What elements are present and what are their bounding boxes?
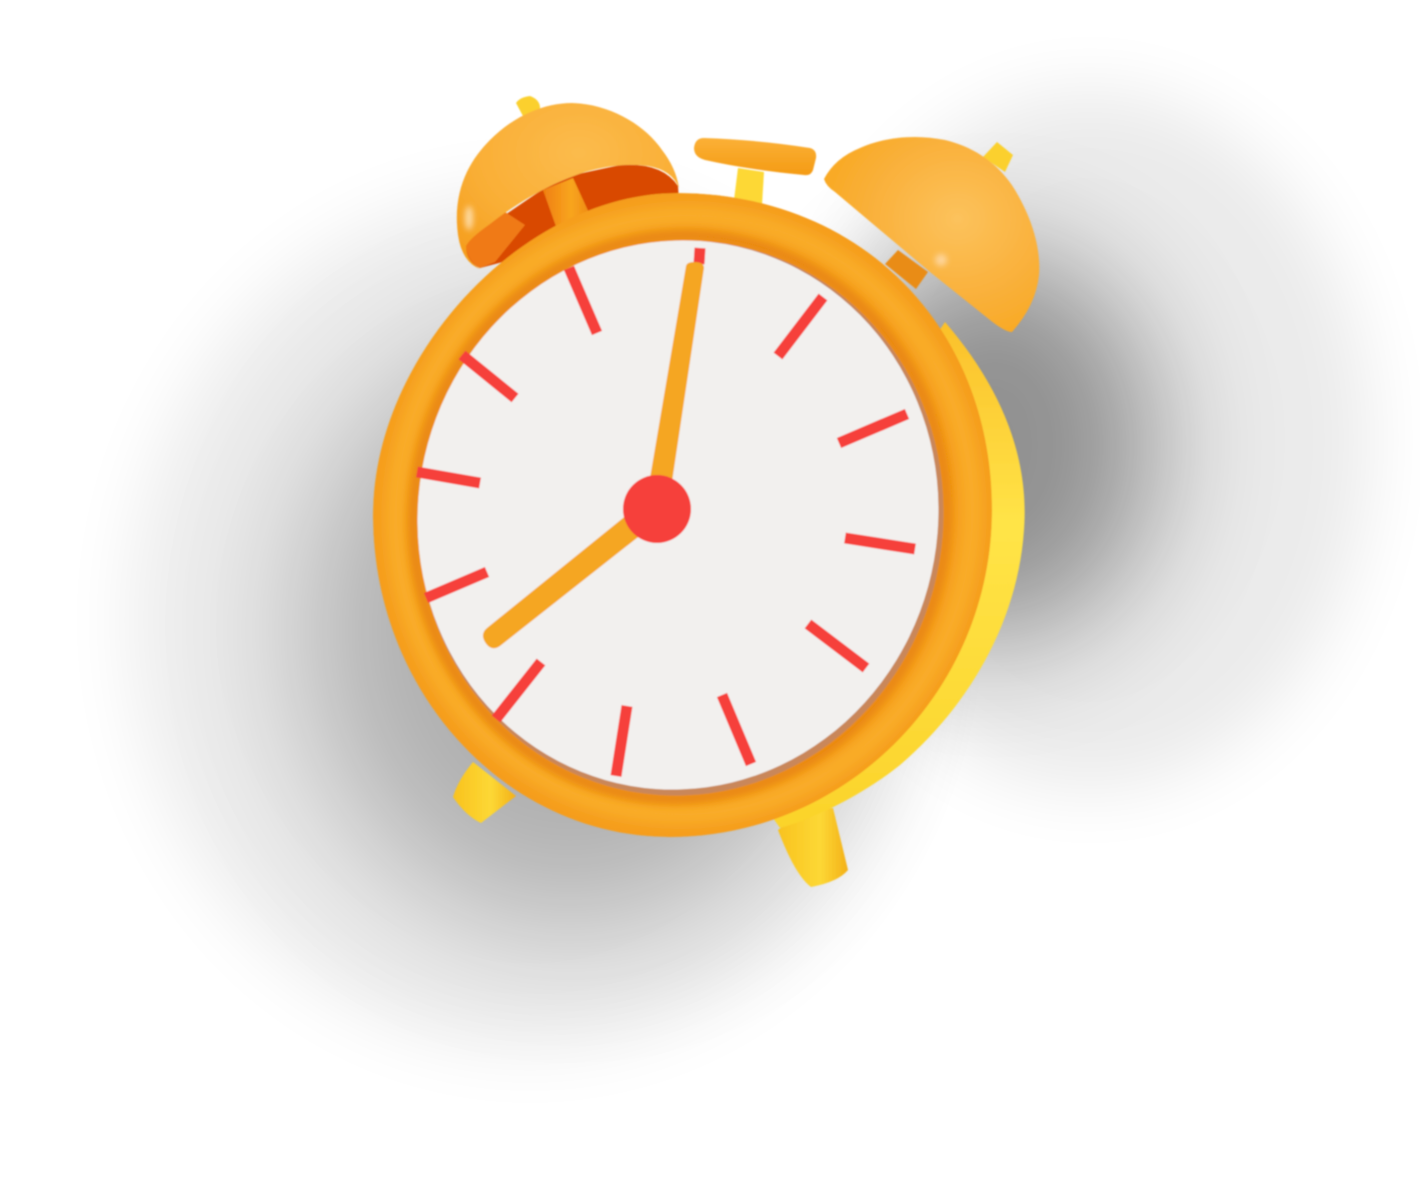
- left bell dome: [457, 103, 679, 269]
- hour hand: [483, 514, 642, 648]
- right bell dome: [824, 137, 1039, 332]
- alarm clock illustration: [129, 86, 1375, 1056]
- right bell: [824, 137, 1039, 332]
- right leg: [778, 808, 848, 887]
- face rim: [375, 199, 987, 837]
- left bell stem: [543, 178, 590, 232]
- clock ring: [372, 192, 993, 838]
- minute hand: [650, 262, 704, 482]
- left bell interior: [464, 165, 680, 268]
- face dial: [374, 199, 982, 831]
- left leg: [453, 762, 516, 823]
- left bell lower glow: [465, 212, 525, 268]
- hour tick marks: [417, 248, 915, 776]
- left bell finial: [516, 96, 540, 118]
- clock back body: [690, 322, 1025, 828]
- clock artwork: [348, 96, 1039, 887]
- right bell finial: [983, 142, 1013, 172]
- left bell highlight: [465, 206, 473, 230]
- button stem: [734, 168, 764, 205]
- drop shadow: [130, 90, 1370, 1050]
- ring inner shade: [406, 227, 953, 808]
- top button: [694, 138, 816, 205]
- left bell: [457, 96, 680, 269]
- ring highlight: [373, 193, 983, 838]
- clock face: [374, 199, 987, 837]
- right bell stem: [885, 250, 928, 289]
- center cap: [623, 475, 691, 543]
- button bar: [694, 138, 816, 175]
- right bell highlights: [935, 254, 947, 266]
